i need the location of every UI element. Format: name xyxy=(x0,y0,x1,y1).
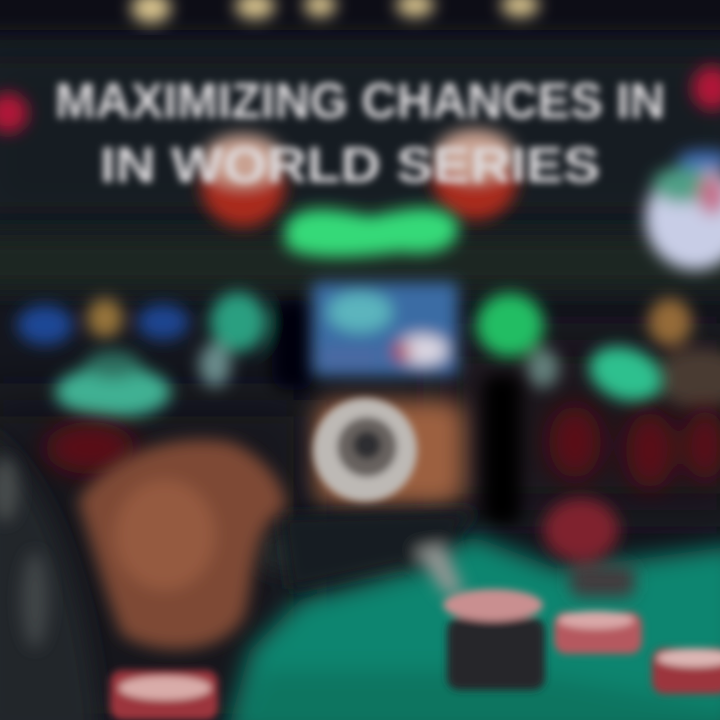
dark figure xyxy=(272,300,314,390)
chip stack middle right xyxy=(554,611,642,654)
sleeve xyxy=(0,430,100,720)
title: IN WORLD SERIES xyxy=(100,137,600,193)
red seats xyxy=(45,406,720,488)
stacked chips xyxy=(110,498,720,720)
orange figure xyxy=(87,298,123,338)
green icon xyxy=(210,292,266,352)
poker chip on screen xyxy=(313,398,465,505)
tan figure xyxy=(648,298,692,346)
stage lights xyxy=(131,0,539,23)
laptop base xyxy=(280,510,480,595)
green icon right xyxy=(476,293,544,357)
green pill button xyxy=(285,208,458,257)
hand xyxy=(78,440,286,649)
chip stack centre xyxy=(443,589,545,690)
title xyxy=(55,73,665,193)
chip stack far right xyxy=(652,648,720,694)
green oval right xyxy=(581,337,671,411)
blue icon left xyxy=(17,305,73,345)
central monitor xyxy=(312,282,458,376)
green dome left xyxy=(55,351,171,418)
globe icon right xyxy=(645,150,720,270)
green table xyxy=(225,535,720,720)
row of icons xyxy=(17,292,720,408)
red corner accents xyxy=(0,66,720,133)
badges behind title xyxy=(201,129,517,227)
dark post xyxy=(483,375,521,525)
blue icon xyxy=(137,304,189,340)
title: MAXIMIZING CHANCES IN xyxy=(55,73,665,129)
right badge xyxy=(433,129,517,220)
chip top right xyxy=(543,498,635,597)
chip stack bottom left xyxy=(110,670,218,720)
left badge xyxy=(201,134,285,227)
